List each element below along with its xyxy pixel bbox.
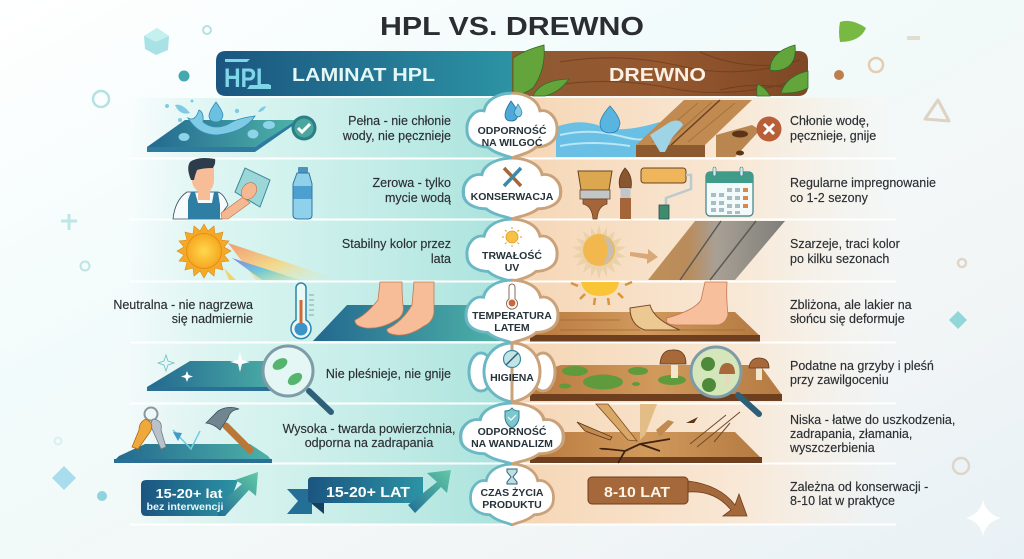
cloud: UV durability: TRWAŁOŚĆ <box>482 250 542 262</box>
icon: shield <box>505 408 519 428</box>
icon: mushrooms <box>660 350 769 380</box>
cloud: product lifetime: PRODUKTU <box>482 499 542 511</box>
icon: magnifier with bacteria <box>263 346 331 412</box>
cloud: moisture resistance: NA WILGOĆ <box>482 136 543 149</box>
cloud: moisture resistance <box>467 93 557 158</box>
text: HPL temperature: Neutralna - nie nagrzewa <box>113 298 253 312</box>
header: laminat HPL <box>216 51 512 96</box>
badge: 15-20+ years without intervention <box>141 472 258 516</box>
text: wood moisture: pęcznieje, gnije <box>790 129 876 143</box>
cloud: product lifetime: CZAS ŻYCIA <box>480 487 544 499</box>
illustration: clean HPL slab under magnifier <box>147 346 331 412</box>
icon: thermometer <box>291 283 314 339</box>
text: HPL vandalism: Wysoka - twarda powierzchnia, <box>283 422 455 436</box>
text: wood temperature: słońcu się deformuje <box>790 312 905 326</box>
text: HPL UV: lata <box>431 252 451 266</box>
illustration: water on HPL slab <box>147 100 316 152</box>
cloud: hygiene <box>469 343 555 402</box>
text: wood lifetime: Zależna od konserwacji - <box>790 480 928 494</box>
text: HPL temperature: się nadmiernie <box>172 312 253 326</box>
icon: check badge <box>292 116 316 140</box>
title: HPL VS. DREWNO <box>380 11 644 41</box>
illustration: brushes, roller and calendar <box>578 167 753 219</box>
cloud: summer temperature: TEMPERATURA <box>472 310 552 322</box>
icon: water bottle <box>293 167 312 219</box>
icon: leaves <box>513 45 808 96</box>
text: wood maintenance: Regularne impregnowanie <box>790 176 936 190</box>
text: HPL UV: Stabilny kolor przez <box>342 237 451 251</box>
cloud: UV durability: UV <box>505 262 519 274</box>
cloud: moisture resistance: ODPORNOŚĆ <box>478 125 546 137</box>
header label: drewno: DREWNO <box>609 65 706 85</box>
text: wood hygiene: Podatne na grzyby i pleśń <box>790 359 934 373</box>
text: wood UV: po kilku sezonach <box>790 252 889 266</box>
header: drewno <box>512 45 808 96</box>
icon: drops <box>505 101 522 121</box>
icon: hammer <box>206 407 250 450</box>
illustration: cracked wood with splinters <box>530 404 762 463</box>
ribbon: 15-20+ LAT <box>287 470 451 514</box>
badge: 15-20+ years without intervention: bez interwencji <box>146 502 224 513</box>
icon: hourglass <box>507 469 517 484</box>
icon: small thermometer <box>506 284 517 309</box>
cloud: maintenance <box>463 158 561 219</box>
illustration: sun and rainbow on HPL <box>177 224 340 280</box>
illustration: mossy wood with mushrooms <box>530 347 782 414</box>
header label: laminat HPL: LAMINAT HPL <box>292 65 435 85</box>
icon: crossed-out germs <box>504 350 520 368</box>
text: HPL moisture: wody, nie pęcznieje <box>342 129 451 143</box>
cloud: summer temperature: LATEM <box>494 322 530 334</box>
icon: calendar <box>706 167 753 216</box>
illustration: sun and greying plank <box>572 221 785 280</box>
illustration: sun, deformed lacquer and foot on wood <box>530 282 760 342</box>
illustration: keys and hammer on HPL <box>114 407 272 463</box>
text: HPL moisture: Pełna - nie chłonie <box>348 114 451 128</box>
cloud: hygiene: HIGIENA <box>490 372 534 384</box>
teal comparison rows <box>130 98 512 524</box>
icon: cross badge <box>756 116 782 142</box>
badge: 8-10 LAT with falling arrow <box>588 477 747 516</box>
text: wood vandalism: Niska - łatwe do uszkodzenia, <box>790 413 955 427</box>
icon: HPL logo: HPL <box>224 63 270 93</box>
ribbon: 15-20+ LAT: 15-20+ LAT <box>326 484 410 501</box>
badge: 8-10 LAT with falling arrow: 8-10 LAT <box>604 484 670 501</box>
text: wood vandalism: wyszczerbienia <box>789 441 875 455</box>
text: HPL maintenance: Zerowa - tylko <box>372 176 451 190</box>
text: HPL vandalism: odporna na zadrapania <box>305 436 433 450</box>
cloud: maintenance: KONSERWACJA <box>471 191 554 203</box>
cloud: product lifetime <box>471 464 553 525</box>
text: HPL maintenance: mycie wodą <box>385 191 451 205</box>
icon: small sun <box>502 227 522 247</box>
text: wood maintenance: co 1-2 sezony <box>790 191 869 205</box>
text: wood moisture: Chłonie wodę, <box>790 114 869 128</box>
text: wood temperature: Zbliżona, ale lakier na <box>790 298 912 312</box>
icon: magnifier with mould <box>691 347 759 414</box>
text: wood hygiene: przy zawilgoceniu <box>790 373 889 387</box>
cloud: UV durability <box>467 219 557 282</box>
illustration: man wiping with cloth <box>173 158 312 219</box>
text: wood vandalism: zadrapania, złamania, <box>790 427 912 441</box>
badge: 15-20+ years without intervention: 15-20+ lat <box>156 486 223 501</box>
text: HPL hygiene: Nie pleśnieje, nie gnije <box>326 367 451 381</box>
cloud: vandalism resistance <box>461 403 563 464</box>
wood comparison rows <box>512 98 896 524</box>
icon: tools <box>504 168 521 186</box>
cloud: summer temperature <box>466 280 558 343</box>
cloud: vandalism resistance: NA WANDALIZM <box>471 438 553 450</box>
cloud: vandalism resistance: ODPORNOŚĆ <box>478 426 546 438</box>
row dividers <box>130 97 896 526</box>
text: wood lifetime: 8-10 lat w praktyce <box>790 494 895 508</box>
illustration: water and swelling planks <box>556 100 782 157</box>
text: wood UV: Szarzeje, traci kolor <box>790 237 900 251</box>
illustration: bare feet on cool HPL <box>313 282 500 341</box>
